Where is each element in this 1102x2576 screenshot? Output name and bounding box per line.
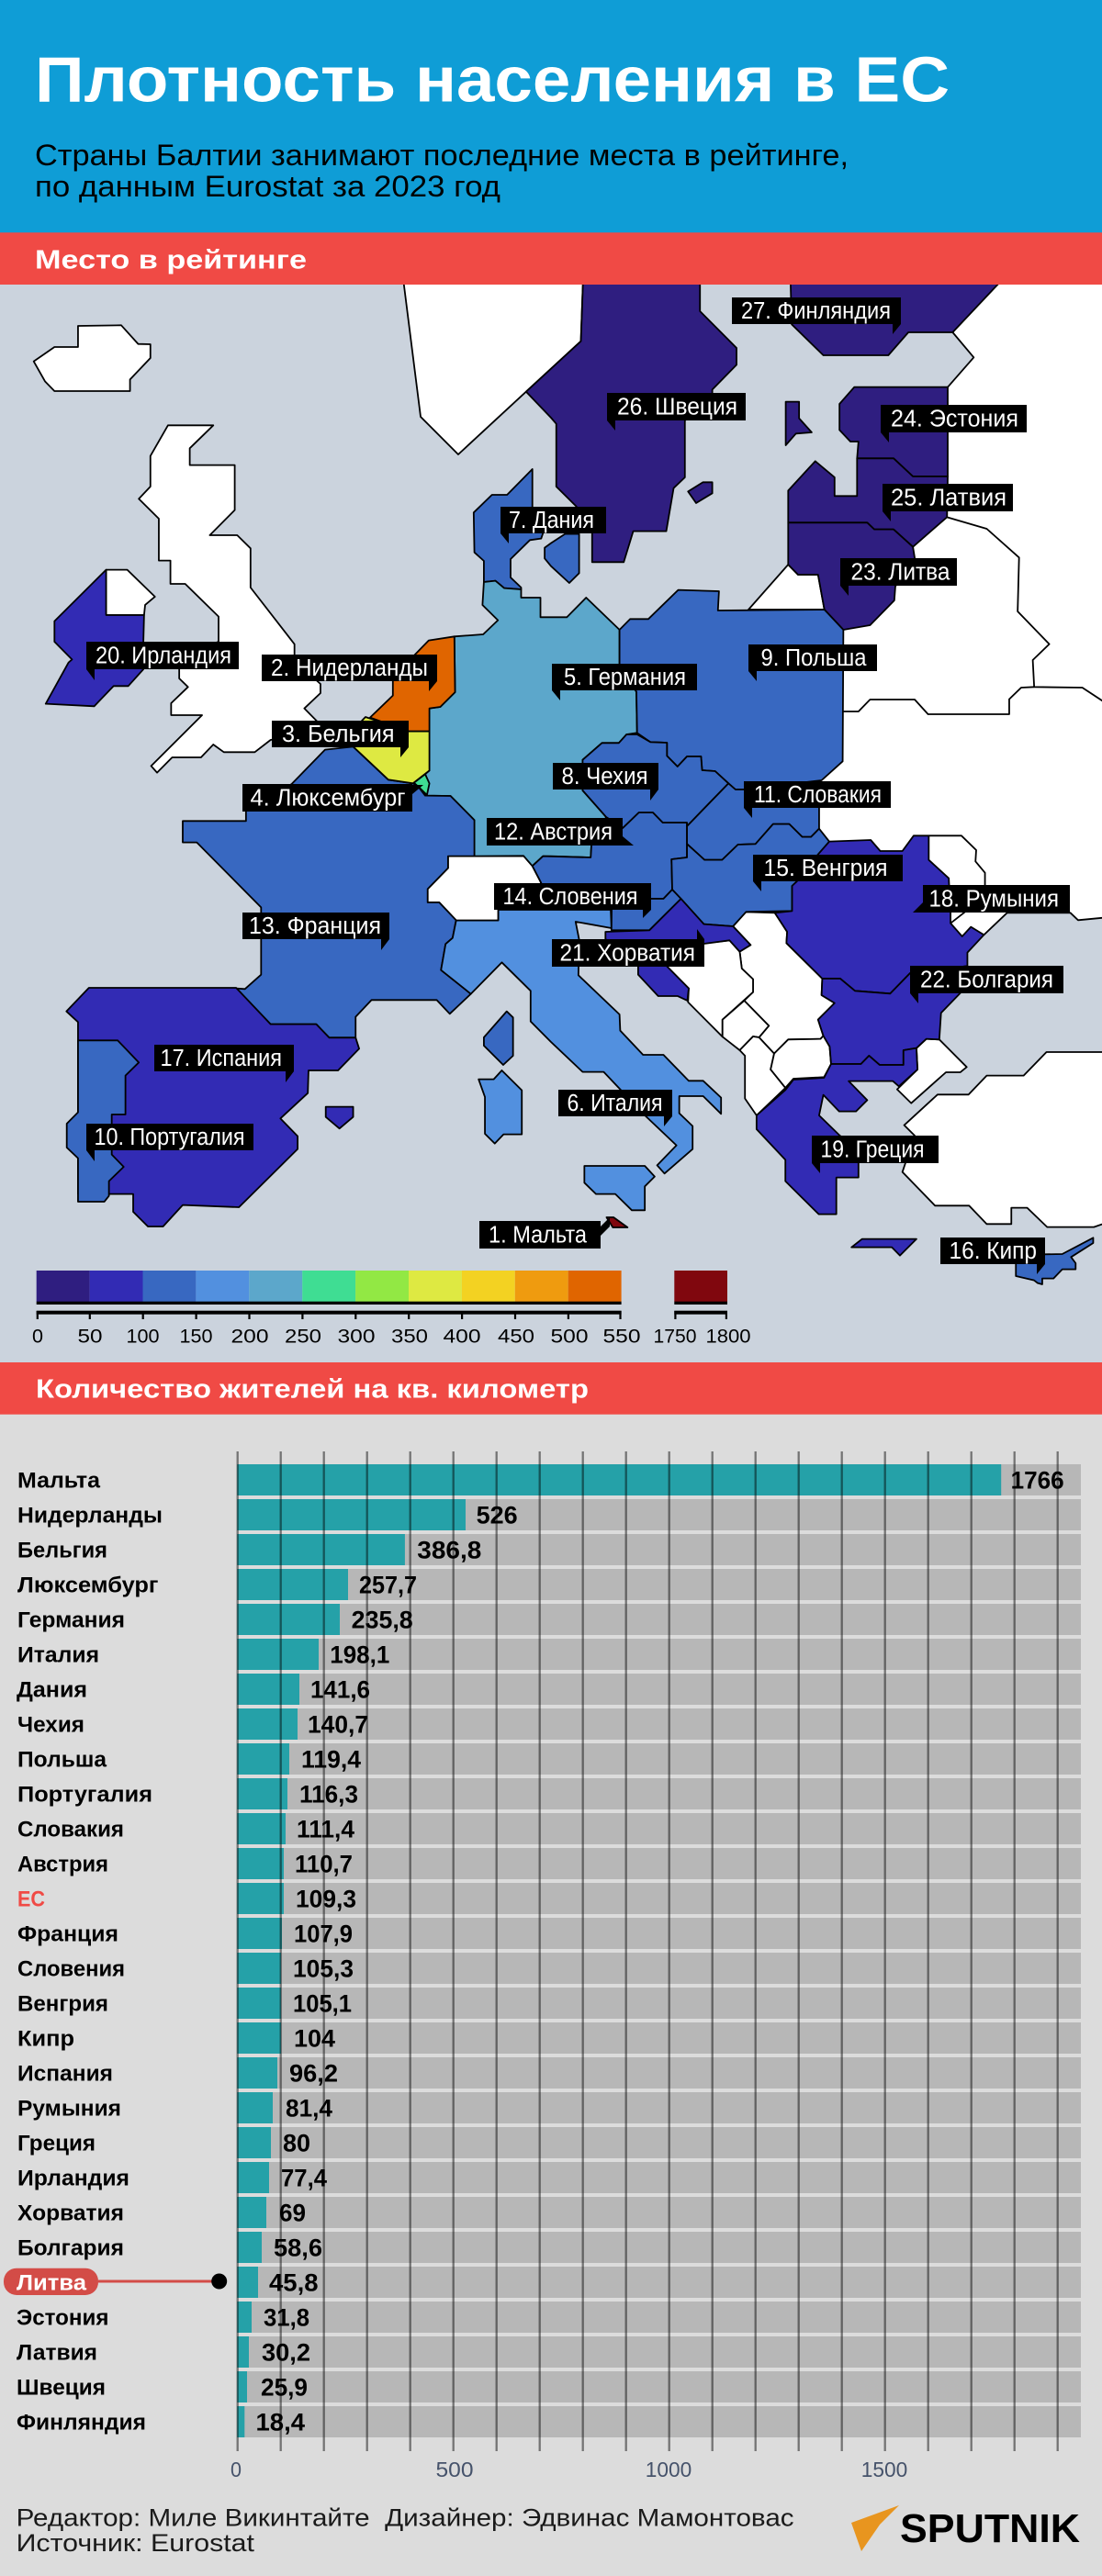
chart values: 81,4: [286, 2095, 332, 2122]
label: Lithuania: 23. Литва: [850, 560, 950, 586]
legend tick labels: 400: [443, 1327, 481, 1348]
chart values: 140,7: [308, 1711, 368, 1739]
footer credits: Редактор: Миле Викинтайте Дизайнер: Эдвинас Мамонтовас: [17, 2504, 794, 2532]
chart values: 77,4: [281, 2165, 327, 2192]
chart country names: Дания: [17, 1678, 87, 1703]
label: Malta: [479, 1217, 610, 1249]
chart values: 116,3: [299, 1781, 358, 1809]
panel: header: [0, 0, 1102, 233]
legend tick labels: 200: [231, 1327, 268, 1348]
label: France: 13. Франция: [249, 913, 381, 939]
section heading: map: [0, 232, 1102, 285]
title: Плотность населения в ЕС: [35, 44, 950, 116]
label: Slovakia: 11. Словакия: [754, 782, 882, 808]
chart values: 235,8: [352, 1607, 413, 1634]
country: Bulgaria: [818, 966, 967, 1065]
label: Finland: [732, 297, 901, 334]
chart country names: Хорватия: [17, 2201, 124, 2226]
section heading: map: Место в рейтинге: [35, 246, 307, 275]
legend tick labels: 0: [32, 1327, 43, 1348]
chart values: 45,8: [269, 2269, 318, 2297]
legend tick labels: 500: [551, 1327, 588, 1348]
bar chart: [4, 1451, 1081, 2481]
country: Greece: [757, 1048, 917, 1215]
country: Balearic islands: [326, 1107, 354, 1128]
border: Belarus east: [947, 517, 1102, 704]
chart track bars: [237, 1464, 1081, 2437]
chart values: 18,4: [255, 2409, 305, 2436]
chart values: 104: [294, 2025, 335, 2053]
label: Spain: 17. Испания: [160, 1046, 282, 1071]
country: Luxembourg: [414, 774, 430, 795]
country: Portugal: [67, 1040, 139, 1202]
country: Spain: [66, 988, 359, 1226]
chart country names: Франция: [17, 1922, 118, 1947]
chart values: 526: [477, 1502, 518, 1529]
chart values: 119,4: [301, 1746, 361, 1774]
country: Hungary: [671, 824, 829, 926]
country: France: [183, 746, 475, 1037]
subtitle: по данным Eurostat за 2023 год: [35, 170, 500, 203]
chart country names: Эстония: [17, 2306, 108, 2331]
legend axis: [37, 1311, 727, 1319]
legend tick labels: 300: [338, 1327, 375, 1348]
chart values: 105,1: [293, 1990, 352, 2018]
label: Finland: 27. Финляндия: [741, 298, 891, 324]
border: Belarus south: [843, 687, 1034, 714]
section heading: chart: [0, 1362, 1102, 1415]
chart x axis labels: 1500: [861, 2458, 907, 2481]
label: Latvia: [883, 484, 1013, 521]
label: Estonia: 24. Эстония: [891, 406, 1018, 431]
label: Portugal: [86, 1124, 253, 1161]
legend colour swatches: [37, 1271, 727, 1305]
footer credits: Источник: Eurostat: [17, 2529, 255, 2557]
country: Germany: [425, 581, 637, 866]
chart country names: Португалия: [17, 1783, 152, 1808]
label: Sweden: 26. Швеция: [617, 395, 737, 420]
chart values: 1766: [1011, 1467, 1064, 1495]
country: Crete: [851, 1239, 916, 1256]
chart values: 107,9: [294, 1921, 353, 1948]
subtitle: Страны Балтии занимают последние места в рейтинге,: [35, 139, 849, 172]
label: Netherlands: [262, 655, 437, 691]
label: Denmark: 7. Дания: [509, 508, 594, 533]
label: Latvia: 25. Латвия: [891, 485, 1006, 510]
chart values: 105,3: [293, 1955, 354, 1983]
non-EU land: Russia, Belarus, Ukraine, Moldova: [808, 273, 1102, 948]
label: Czechia: [553, 763, 658, 801]
country: Finland: [791, 273, 1009, 355]
chart country names: Германия: [17, 1608, 125, 1633]
country: Sardinia: [478, 1070, 522, 1144]
chart country names: Кипр: [17, 2027, 74, 2052]
non-EU land: Northern Ireland: [107, 570, 155, 615]
non-EU land: North Macedonia: [770, 1036, 831, 1088]
label: Slovakia: [744, 781, 891, 818]
country: Sicily: [584, 1166, 655, 1210]
chart country names: Польша: [17, 1748, 107, 1773]
country: Slovenia: [612, 890, 681, 930]
country: Czechia: [582, 734, 728, 828]
label: Hungary: 15. Венгрия: [764, 856, 887, 881]
chart values: 96,2: [289, 2060, 338, 2088]
chart x axis labels: 1000: [646, 2458, 692, 2481]
legend: [32, 1271, 751, 1348]
chart values: 386,8: [417, 1537, 481, 1564]
label: Austria: 12. Австрия: [494, 819, 613, 845]
label: Denmark: [500, 507, 606, 543]
non-EU land: Switzerland: [428, 856, 541, 921]
label: Ireland: [86, 642, 239, 680]
section heading: chart: Количество жителей на кв. километр: [36, 1375, 589, 1405]
country: Slovakia: [687, 781, 819, 860]
legend tick labels: 150: [180, 1327, 213, 1348]
legend tick labels: 350: [391, 1327, 428, 1348]
non-EU land: Norway: [402, 273, 583, 454]
legend tick labels: 50: [77, 1327, 103, 1348]
label: Hungary: [753, 855, 903, 891]
label: Poland: 9. Польша: [760, 645, 867, 671]
chart country names: Словакия: [17, 1818, 124, 1842]
label: Bulgaria: [910, 966, 1063, 1003]
chart country names: Болгария: [17, 2236, 124, 2261]
country: Malta: [606, 1217, 627, 1227]
chart country names: Литва: [17, 2271, 87, 2296]
label: Croatia: 21. Хорватия: [560, 940, 695, 966]
country: Croatia: [605, 899, 750, 1001]
country: Romania: [775, 835, 984, 993]
non-EU land: Great Britain: [139, 425, 320, 773]
chart values: 31,8: [264, 2304, 309, 2332]
label: Malta: 1. Мальта: [489, 1223, 588, 1249]
label: Estonia: [881, 405, 1027, 442]
chart values: 30,2: [262, 2339, 310, 2367]
label: Luxembourg: 4. Люксембург: [250, 786, 406, 812]
border: Moldova: [928, 835, 985, 924]
chart country names: Греция: [17, 2132, 96, 2156]
legend tick labels: [32, 1327, 751, 1348]
country: Belgium: [352, 717, 430, 783]
callout: Lithuania: [4, 2268, 227, 2295]
non-EU land: Montenegro: [723, 1001, 769, 1050]
chart country names: Мальта: [17, 1469, 101, 1494]
country: Ireland: [46, 570, 144, 706]
country: Corsica: [484, 1012, 513, 1065]
country: Estonia: [839, 387, 948, 476]
label: Ireland: 20. Ирландия: [96, 643, 231, 668]
label: Slovenia: [494, 883, 651, 918]
label: Slovenia: 14. Словения: [503, 884, 637, 910]
country: Latvia: [788, 458, 948, 547]
non-EU land: Iceland: [34, 325, 151, 391]
chart values: 110,7: [295, 1851, 353, 1878]
label: France: [242, 913, 389, 950]
chart values: 58,6: [274, 2234, 322, 2262]
non-EU land: Kaliningrad: [748, 565, 825, 610]
chart country names: Австрия: [17, 1853, 108, 1877]
non-EU land: Serbia: [733, 912, 835, 1054]
chart country names: Чехия: [17, 1713, 84, 1738]
label: Bulgaria: 22. Болгария: [920, 968, 1053, 993]
label: Greece: 19. Греция: [821, 1137, 924, 1162]
chart values: 198,1: [330, 1641, 389, 1669]
country: Sweden island Gotland: [688, 482, 713, 503]
country: Denmark: [474, 469, 543, 589]
chart values: 80: [283, 2130, 310, 2157]
legend tick labels: 1800: [705, 1327, 751, 1348]
chart country names: Румыния: [17, 2097, 121, 2122]
chart country names: ЕС: [17, 1887, 45, 1912]
chart x axis labels: 500: [435, 2458, 474, 2481]
chart country names: Швеция: [17, 2376, 106, 2401]
chart x axis labels: 0: [231, 2458, 242, 2481]
chart country names: Люксембург: [17, 1574, 158, 1598]
panel: map: [0, 232, 1102, 1363]
map labels: [86, 297, 1070, 1274]
country: Sweden: [526, 273, 737, 562]
chart values: 25,9: [261, 2374, 308, 2402]
non-EU land: Albania: [739, 1036, 785, 1115]
chart country names: [17, 1469, 163, 2436]
label: Cyprus: [940, 1238, 1045, 1274]
legend tick labels: 100: [127, 1327, 160, 1348]
legend tick labels: 450: [498, 1327, 534, 1348]
chart values: 69: [279, 2200, 306, 2227]
label: Sweden: [607, 393, 746, 431]
non-EU land: Bosnia: [657, 940, 753, 1036]
label: Germany: [552, 664, 697, 700]
chart grid lines: [238, 1451, 1058, 2451]
label: Greece: [812, 1136, 939, 1173]
chart values: 109,3: [296, 1886, 356, 1913]
country: Italy: [441, 910, 721, 1173]
label: Spain: [154, 1045, 294, 1082]
label: Croatia: [552, 929, 704, 967]
country: Estonia island: [786, 402, 812, 445]
label: Czechia: 8. Чехия: [562, 764, 648, 790]
label: Poland: [748, 644, 877, 681]
chart country names: Нидерланды: [17, 1504, 163, 1529]
legend tick labels: 1750: [654, 1327, 696, 1348]
chart country names: Испания: [17, 2062, 113, 2087]
label: Belgium: 3. Бельгия: [282, 722, 395, 747]
footer credits: [17, 2504, 794, 2557]
chart country names: Италия: [17, 1643, 99, 1668]
chart country names: Латвия: [17, 2341, 97, 2366]
chart values: 257,7: [359, 1572, 417, 1599]
label: Italy: 6. Италия: [568, 1091, 663, 1116]
country: Poland: [620, 590, 843, 790]
country: Lithuania: [788, 522, 915, 630]
country: Cyprus: [1016, 1238, 1093, 1284]
chart values: 111,4: [297, 1816, 354, 1843]
country: Austria: [533, 812, 687, 900]
chart country names: Венгрия: [17, 1992, 108, 2017]
label: Cyprus: 16. Кипр: [950, 1238, 1037, 1264]
chart values: [255, 1467, 1064, 2436]
chart values: 141,6: [310, 1676, 370, 1704]
label: Netherlands: 2. Нидерланды: [271, 655, 428, 681]
chart x axis labels: [231, 2458, 907, 2481]
non-EU land: European Turkey: [897, 1039, 967, 1103]
chart country names: Ирландия: [17, 2167, 129, 2191]
country: Netherlands: [370, 636, 455, 732]
label: Italy: [558, 1090, 672, 1126]
subtitle: [35, 139, 849, 203]
label: Belgium: [272, 721, 409, 757]
legend tick labels: 550: [602, 1327, 641, 1348]
chart value bars: [237, 1464, 1001, 2437]
country: Denmark Zealand: [545, 534, 579, 583]
logo: Sputnik: SPUTNIK: [900, 2507, 1081, 2551]
chart country names: Финляндия: [17, 2411, 146, 2436]
label: Lithuania: [840, 558, 957, 596]
chart country names: Бельгия: [17, 1539, 107, 1563]
label: Portugal: 10. Португалия: [94, 1125, 244, 1150]
label: Germany: 5. Германия: [564, 665, 686, 690]
non-EU land: Turkey: [903, 1052, 1102, 1227]
legend tick labels: 250: [285, 1327, 321, 1348]
chart country names: Словения: [17, 1957, 125, 1982]
label: Romania: 18. Румыния: [929, 887, 1059, 913]
